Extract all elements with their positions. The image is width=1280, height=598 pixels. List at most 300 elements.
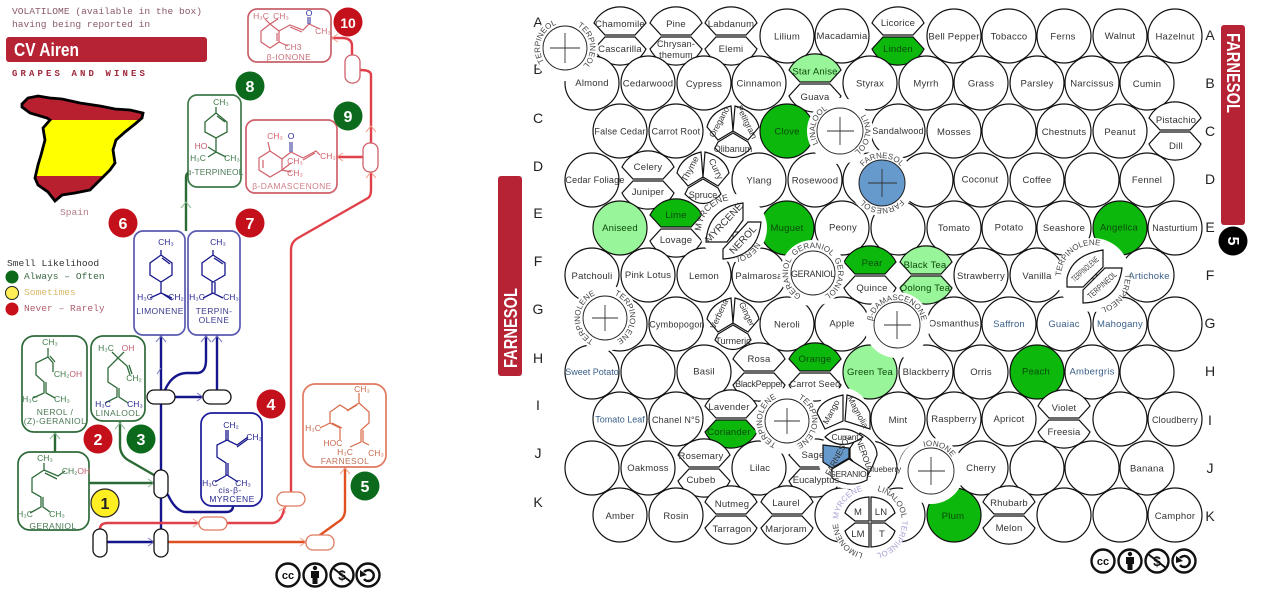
marker: terpinolene and terpineol F: TERPINOLENE: [1055, 239, 1100, 276]
marker: nerol geraniol farnesol J: Sage: [802, 450, 824, 461]
aroma grid row E: Muguet: [771, 223, 804, 234]
aroma grid row D: Spruce: [689, 190, 717, 200]
aroma grid row A: Chamomile: [595, 19, 645, 30]
aroma grid row A: themum: [659, 50, 693, 60]
aroma grid row J: Cubeb: [686, 475, 716, 486]
marker: quadrant myrcene linalool limonene terpineol K: TERPINEOL: [876, 520, 908, 558]
aroma grid row D: Juniper: [632, 187, 664, 198]
molecule: farnesol: [303, 384, 386, 467]
molecule: geraniol: H₃C: [17, 509, 33, 519]
row letters right: E: [1205, 219, 1215, 235]
aroma grid row B: Cedarwood: [623, 78, 673, 90]
molecule: cis-beta-myrcene: H₃C: [202, 478, 218, 488]
marker: terpinolene and terpineol F: TERPINOLENE: [1069, 254, 1101, 284]
aroma grid row E: Seashore: [1043, 223, 1085, 234]
marker: quadrant myrcene linalool limonene terpineol K: LN: [875, 507, 887, 518]
aroma grid row B: Cypress: [686, 79, 722, 90]
aroma grid row H: Ambergris: [1069, 366, 1115, 378]
molecule: beta-ionone: β-IONONE: [267, 52, 311, 62]
aroma grid row G: Ginger: [737, 300, 757, 328]
aroma grid row C: Peanut: [1104, 127, 1136, 138]
badge: 1: 1: [101, 496, 110, 513]
molecule: linalool: CH₂: [126, 373, 142, 383]
marker: mango magnolia currant I: Mango: [820, 398, 842, 426]
aroma grid row A: Pine: [666, 19, 686, 30]
aroma grid row B: Cinnamon: [737, 78, 781, 90]
aroma grid row A: Ferns: [1050, 32, 1076, 42]
aroma grid row I: Chanel N°5: [652, 415, 700, 425]
marker: terpineol A: [534, 20, 596, 70]
molecule: geraniol: CH₂OH: [62, 466, 90, 476]
molecule: terpinolene: TERPIN-: [196, 306, 232, 316]
molecule: alpha-terpineol: CH₃: [213, 97, 229, 107]
aroma grid row E: Lime: [665, 210, 687, 221]
aroma grid row K: Nutmeg: [715, 499, 749, 510]
molecule: farnesol: CH₃: [368, 448, 384, 458]
marker: myrcene and nerol E: [694, 194, 762, 262]
marker: mango magnolia currant I: Magnolia: [845, 394, 871, 430]
aroma grid row C: Dill: [1169, 141, 1183, 152]
aroma grid row I: Mint: [889, 415, 908, 426]
molecule: linalool: [91, 336, 145, 421]
aroma grid row F: Patchouli: [572, 271, 612, 282]
molecule: beta-ionone: [248, 8, 331, 62]
panel: header text: [12, 6, 202, 30]
molecule: cis-beta-myrcene: CH₃: [235, 478, 251, 488]
aroma grid row F: Pink Lotus: [625, 270, 671, 281]
icon: creative commons badges left: [276, 564, 380, 586]
row letters right: I: [1208, 412, 1212, 428]
aroma grid row H: Carrot Seed: [790, 379, 840, 389]
marker: quadrant myrcene linalool limonene terpineol K: T: [879, 529, 885, 540]
aroma grid row H: [565, 343, 1174, 401]
white halos around marked cells: [532, 15, 1130, 560]
aroma grid row C: Petitgrain: [735, 104, 759, 141]
aroma grid row D: Celery: [634, 162, 662, 173]
aroma grid row F: [565, 246, 1174, 304]
aroma grid row D: Curry: [707, 157, 726, 182]
aroma grid row E: Tomato: [938, 223, 970, 234]
marker: farnesol D (blue): FARNESOL: [860, 152, 902, 166]
molecule: terpinolene: OLENE: [199, 315, 229, 325]
aroma grid row F: Quince: [856, 283, 888, 294]
aroma grid row A: [594, 7, 1202, 65]
aroma grid row J: Banana: [1130, 464, 1164, 474]
marker: geraniol F: GERANIOL: [824, 258, 844, 298]
legend: smell likelihood: Smell Likelihood: [7, 258, 99, 269]
molecule: terpinolene: CH₃: [223, 292, 239, 302]
marker: terpinolene G: [574, 290, 636, 345]
aroma grid row E: Peony: [829, 222, 857, 234]
icon: creative commons badges left: $: [338, 567, 346, 583]
row letters right: G: [1205, 315, 1215, 331]
marker: ionone J: IONONE: [923, 440, 956, 457]
aroma grid row H: Orris: [970, 367, 992, 378]
marker: terpinolene and terpineol F: TERPINEOL: [1101, 274, 1130, 312]
badge: 3: [126, 424, 156, 454]
row letters left: I: [536, 397, 540, 413]
molecule: beta-damascenone: CH₃: [320, 151, 336, 161]
molecule: beta-ionone: O: [306, 8, 313, 18]
molecule: linalool: LINALOOL: [96, 408, 140, 418]
molecule: geraniol: CH₃: [49, 509, 65, 519]
marker: geraniol F: GERANIOL: [792, 242, 833, 256]
aroma grid row F: Strawberry: [957, 271, 1005, 282]
aroma grid row G: Apple: [829, 318, 855, 330]
aroma grid row I: Apricot: [994, 414, 1025, 425]
aroma grid row D: Thyme: [679, 155, 701, 183]
molecule: nerol: (Z)-GERANIOL: [24, 416, 86, 426]
aroma grid row I: Freesia: [1047, 427, 1081, 438]
badge: 3: 3: [137, 432, 146, 449]
badge: 10: 10: [340, 15, 356, 31]
badge: 7: [236, 208, 264, 238]
arrow: limonene to alpha-terpineol: [181, 173, 191, 231]
marker: geraniol F: [782, 242, 844, 299]
aroma grid row A: Elemi: [719, 44, 743, 55]
row letters left: H: [533, 350, 543, 366]
molecule: limonene: LIMONENE: [136, 306, 184, 316]
badge: 8: [236, 72, 264, 100]
aroma grid row A: Tobacco: [991, 32, 1027, 42]
aroma grid row D: Rosewood: [792, 176, 838, 186]
marker: quadrant myrcene linalool limonene terpineol K: [832, 486, 908, 558]
aroma grid row J: Lilac: [750, 463, 770, 474]
molecule: nerol: NEROL /: [37, 407, 73, 417]
molecule: beta-ionone: CH₃: [315, 26, 331, 36]
molecule: geraniol: CH₃: [37, 453, 53, 463]
molecule: linalool: H₃C: [95, 399, 111, 409]
marker: quadrant myrcene linalool limonene terpineol K: M: [854, 507, 862, 518]
marker: linalool C: LINALOOL: [854, 114, 870, 154]
molecule: geraniol: GERANIOL: [29, 521, 77, 531]
row letters left: J: [534, 445, 542, 461]
aroma grid row I: Coriander: [707, 427, 751, 438]
marker: nerol geraniol farnesol J: Eucalyptus: [793, 475, 839, 486]
aroma grid row I: [593, 390, 1202, 448]
icon: creative commons badges right: $: [1153, 553, 1161, 569]
aroma grid row C: Pistachio: [1156, 115, 1196, 126]
legend: smell likelihood: Sometimes: [24, 287, 76, 298]
icon: Spain map with flag: [20, 94, 145, 203]
aroma grid row D: Coconut: [962, 174, 999, 186]
label: Spain: Spain: [60, 207, 89, 218]
aroma grid row K: Plum: [942, 511, 964, 522]
marker: terpinolene and terpineol F: TERPINEOL: [1085, 269, 1119, 301]
molecule: cis-beta-myrcene: MYRCENE: [209, 494, 255, 504]
aroma grid row C: Chestnuts: [1042, 127, 1086, 138]
marker: terpinolene I: TERPINOLENE: [797, 394, 818, 449]
marker: terpinolene and terpineol F: [1055, 239, 1130, 312]
aroma grid row G: [593, 297, 1202, 351]
aroma grid row D: Coffee: [1022, 175, 1052, 186]
side bar left: FARNESOL: FARNESOL: [501, 288, 521, 368]
aroma grid row K: Tarragon: [712, 524, 752, 535]
aroma grid row B: Narcissus: [1070, 78, 1114, 90]
marker: linalool C: LINALOOL: [810, 106, 828, 146]
aroma grid row J: Oakmoss: [627, 463, 669, 474]
aroma grid row K: Camphor: [1155, 511, 1195, 522]
aroma grid row I: Cloudberry: [1152, 415, 1198, 425]
aroma grid row K: Rosin: [663, 511, 689, 522]
molecule: cis-beta-myrcene: cis-β-: [218, 485, 242, 495]
aroma grid row C: Sandalwood: [872, 126, 924, 136]
aroma grid row E: Lovage: [660, 235, 692, 246]
panel: header text: having being reported in: [12, 19, 150, 30]
molecule: nerol: CH₃: [54, 394, 70, 404]
aroma grid row H: Peach: [1022, 366, 1050, 378]
badge: 5: [350, 472, 380, 500]
panel: header text: VOLATILOME (available in the box): [12, 6, 202, 17]
aroma grid row H: BlackPepper: [735, 379, 783, 389]
title bar: CV Airen: [6, 37, 207, 62]
marker: nerol geraniol farnesol J: GERANIOL: [829, 469, 871, 479]
aroma grid row A: Chrysan-: [657, 39, 695, 49]
aroma grid row G: Cymbopogon: [649, 320, 705, 330]
row letters right: K: [1205, 508, 1215, 524]
molecule: limonene: [134, 231, 185, 335]
aroma grid row C: Oregano: [707, 105, 731, 139]
molecule: limonene: CH₃: [158, 237, 174, 247]
aroma grid row A: Cascarilla: [598, 44, 642, 55]
aroma grid row A: Lilium: [774, 32, 800, 42]
badge: 6: [108, 208, 138, 238]
aroma grid row F: Vanilla: [1022, 271, 1052, 282]
marker: nerol geraniol farnesol J: NEROL: [854, 438, 874, 469]
badge: 10: [334, 8, 362, 36]
molecule: beta-damascenone: β-DAMASCENONE: [252, 181, 332, 191]
row letters right: D: [1205, 171, 1215, 187]
aroma grid row K: Rhubarb: [990, 498, 1028, 509]
molecule: beta-damascenone: CH₃: [287, 168, 303, 178]
molecule: alpha-terpineol: CH₃: [224, 153, 240, 163]
aroma grid row F: Oolong Tea: [900, 283, 951, 294]
badge: 5: 5: [361, 479, 370, 496]
molecule: alpha-terpineol: [186, 95, 244, 187]
badge: 2: 2: [94, 432, 103, 449]
aroma grid row F: Artichoke: [1128, 271, 1170, 282]
aroma grid row E: [593, 199, 1202, 257]
molecule: nerol: CH₂OH: [54, 369, 82, 379]
row letters left: D: [533, 158, 543, 174]
marker: terpinolene I: TERPINOLENE: [756, 394, 776, 448]
icon: creative commons badges right: [1092, 550, 1196, 572]
aroma grid row B: [565, 54, 1174, 112]
aroma grid row H: Orange: [799, 354, 831, 365]
aroma grid row G: Turmeric: [715, 336, 751, 346]
row letters right: [1205, 27, 1215, 524]
aroma grid row A: Linden: [883, 44, 913, 55]
marker: terpinolene I: [756, 394, 818, 449]
aroma grid row J: Rosemary: [679, 451, 723, 462]
aroma grid row F: Palmarosa: [735, 271, 783, 282]
aroma grid row D: Fennel: [1132, 175, 1162, 186]
aroma grid row K: Laurel: [772, 498, 800, 509]
aroma grid row B: Star Anise: [792, 66, 838, 78]
aroma grid row E: Nasturtium: [1152, 223, 1198, 233]
marker: terpinolene G: TERPINOLENE: [574, 290, 595, 345]
aroma grid row C: [593, 102, 1201, 160]
marker: linalool C: [810, 106, 870, 154]
molecule: beta-damascenone: O: [288, 131, 295, 141]
marker: quadrant myrcene linalool limonene terpineol K: MYRCENE: [832, 486, 862, 518]
legend: smell likelihood: Always – Often: [24, 271, 105, 282]
aroma grid row H: Basil: [693, 366, 715, 378]
aroma grid row G: Saffron: [993, 319, 1025, 330]
aroma grid row F: Pear: [862, 258, 882, 269]
molecule: farnesol: H₃C: [337, 447, 353, 457]
row letters left: F: [534, 253, 542, 269]
molecule: farnesol: FARNESOL: [321, 456, 369, 466]
marker: myrcene and nerol E: MYRCENE: [703, 201, 746, 245]
molecule: beta-damascenone: [246, 120, 337, 193]
badge: 6: 6: [119, 216, 128, 233]
row letters left: E: [533, 205, 543, 221]
marker: nerol geraniol farnesol J: [793, 429, 901, 486]
molecule: farnesol: HOC: [324, 438, 342, 448]
aroma grid row H: Green Tea: [847, 367, 894, 378]
badge: 9: 9: [344, 109, 353, 126]
molecule: cis-beta-myrcene: CH₂: [223, 420, 239, 430]
side bar left: FARNESOL: [498, 176, 522, 376]
molecule: cis-beta-myrcene: CH₂: [246, 432, 262, 442]
aroma grid row H: Blackberry: [903, 367, 949, 378]
title bar: CV Airen: CV Airen: [14, 40, 79, 60]
molecule: geraniol: [17, 452, 90, 531]
side bar right: FARNESOL: FARNESOL: [1223, 33, 1243, 113]
icon: creative commons badges left: cc: [282, 570, 294, 582]
legend: smell likelihood: [6, 258, 105, 316]
row letters right: F: [1206, 267, 1214, 283]
row letters left: K: [533, 494, 543, 510]
aroma grid row F: Lemon: [689, 271, 719, 282]
molecule: nerol: CH₃: [42, 337, 58, 347]
side bar right: FARNESOL: [1221, 25, 1245, 225]
aroma grid row F: Black Tea: [904, 260, 947, 271]
molecule: nerol: H₃C: [22, 394, 38, 404]
marker: nerol geraniol farnesol J: Currant: [832, 432, 859, 442]
aroma grid row C: Clove: [774, 126, 800, 138]
aroma grid row K: [593, 486, 1202, 544]
aroma grid row I: Tomato Leaf: [595, 414, 645, 424]
row letters left: B: [533, 61, 543, 77]
molecule: alpha-terpineol: H₃C: [190, 153, 206, 163]
aroma grid row E: Potato: [995, 222, 1023, 234]
badge: black 5: 5: [1224, 237, 1241, 246]
molecule: beta-damascenone: CH₃: [287, 156, 303, 166]
aroma grid row G: Mahogany: [1097, 319, 1143, 330]
aroma grid row C: False Cedar: [594, 126, 646, 136]
marker: quadrant myrcene linalool limonene terpineol K: LINALOOL: [878, 486, 907, 518]
molecule: terpinolene: CH₃: [210, 237, 226, 247]
aroma grid row J: [565, 439, 1174, 497]
row letters right: J: [1206, 460, 1214, 476]
aroma grid row G: Neroli: [774, 320, 800, 330]
aroma grid row A: Walnut: [1105, 31, 1135, 42]
aroma grid row J: Cherry: [966, 463, 996, 474]
aroma grid row A: Hazelnut: [1155, 32, 1195, 42]
molecule: linalool: OH: [122, 343, 134, 353]
aroma grid row K: Amber: [606, 511, 634, 522]
aroma grid row B: Myrrh: [913, 78, 939, 90]
molecule: beta-ionone: H₃C: [253, 11, 269, 21]
marker: myrcene and nerol E: NEROL: [728, 224, 759, 257]
aroma grid row B: Parsley: [1020, 78, 1054, 90]
marker: ionone J: [908, 440, 956, 494]
aroma grid row B: Guava: [800, 92, 830, 103]
molecule: limonene: CH₂: [168, 292, 184, 302]
aroma grid row K: Melon: [996, 523, 1022, 534]
aroma grid row I: Violet: [1052, 403, 1077, 414]
marker: quadrant myrcene linalool limonene terpineol K: LIMONENE: [832, 524, 862, 558]
molecule: alpha-terpineol: α-TERPINEOL: [186, 167, 244, 177]
aroma grid row A: Macadamia: [817, 31, 868, 42]
aroma grid row B: Grass: [968, 78, 994, 90]
marker: geraniol F: GERANIOL: [782, 259, 800, 299]
row letters right: H: [1205, 363, 1215, 379]
badge: 1: [91, 489, 119, 517]
marker: nerol geraniol farnesol J: FARNESOL: [823, 432, 853, 477]
row letters right: B: [1205, 75, 1215, 91]
pathway nodes: [93, 55, 378, 557]
badge: 4: [256, 390, 286, 418]
aroma grid row I: Lavender: [708, 402, 750, 413]
molecule: beta-ionone: CH3: [284, 42, 302, 52]
marker: terpinolene G: TERPINOLENE: [616, 290, 636, 344]
aroma grid row B: Styrax: [856, 78, 884, 90]
marker: myrcene and nerol E: MYRCENE: [694, 194, 728, 230]
marker: quadrant myrcene linalool limonene terpineol K: LM: [851, 529, 865, 540]
aroma grid row G: Osmanthus: [929, 318, 979, 330]
aroma grid row B: Almond: [575, 78, 609, 89]
marker: mango magnolia currant I: [817, 394, 871, 430]
aroma grid row H: Rosa: [748, 354, 771, 365]
row letters right: A: [1205, 27, 1215, 43]
pathway arrows: [50, 34, 376, 546]
aroma grid row D: [565, 151, 1174, 209]
badge: 7: 7: [246, 216, 255, 233]
badge: 4: 4: [267, 397, 276, 414]
icon: creative commons badges right: cc: [1097, 556, 1109, 568]
molecule: farnesol: CH₃: [354, 384, 370, 394]
badge: black 5: [1218, 226, 1248, 256]
molecule: beta-ionone: CH₃: [273, 11, 289, 21]
aroma grid row I: Raspberry: [931, 414, 977, 425]
aroma grid row C: Carrot Root: [652, 126, 701, 136]
marker: nerol geraniol farnesol J: Blueberry: [867, 465, 901, 474]
molecule: linalool: CH₃: [127, 399, 143, 409]
aroma grid row D: Ylang: [746, 176, 772, 186]
subtitle: GRAPES AND WINES: [12, 69, 148, 79]
aroma grid row B: Cumin: [1133, 79, 1161, 90]
molecule: beta-damascenone: CH₃: [267, 131, 283, 141]
row letters left: G: [533, 301, 543, 317]
marker: myrcene and nerol E: NEROL: [734, 242, 760, 262]
aroma grid row G: Guaiac: [1048, 319, 1080, 330]
row letters left: [533, 14, 543, 510]
marker: terpineol A: TERPINEOL: [579, 22, 596, 67]
marker: terpineol A: TERPINEOL: [534, 20, 556, 65]
molecule: nerol: [22, 336, 87, 432]
aroma grid row C: Olibanum: [714, 144, 752, 154]
aroma grid row A: Bell Pepper: [928, 32, 980, 42]
molecule: terpinolene: H₃C: [189, 292, 205, 302]
molecule: linalool: H₃C: [98, 343, 114, 353]
marker: farnesol D (blue): FARNESOL: [862, 200, 904, 214]
molecule: farnesol: H₃C: [305, 423, 321, 433]
badge: 8: 8: [246, 79, 255, 96]
molecule: alpha-terpineol: HO: [195, 141, 208, 151]
